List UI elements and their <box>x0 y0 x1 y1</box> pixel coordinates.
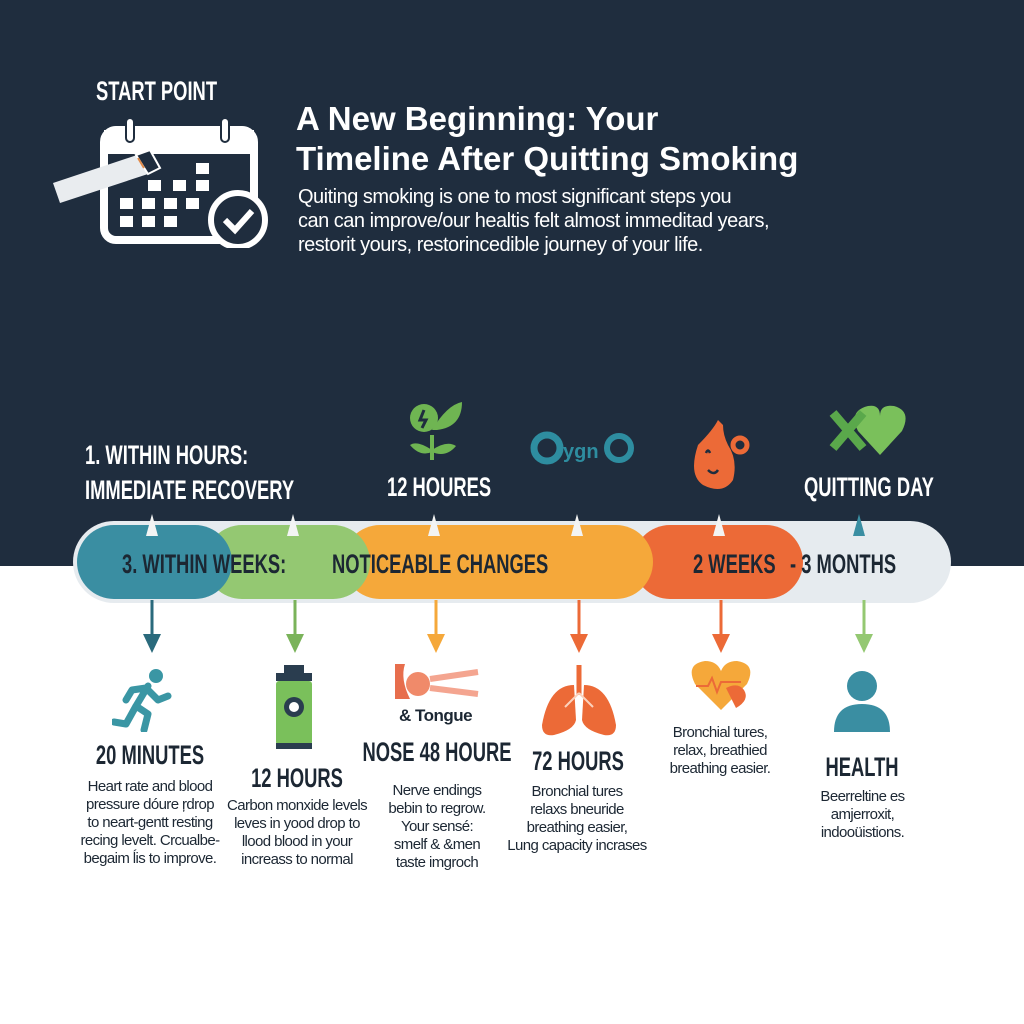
dark header background <box>0 0 1024 566</box>
column 2: 12 hours <box>227 763 368 868</box>
column 1: 20 minutes: to neart-gentt resting <box>87 814 213 831</box>
icon: heart bandage <box>830 406 906 455</box>
column 6: health: indooüistions. <box>821 824 904 841</box>
label: & tongue: & Tongue <box>399 706 472 725</box>
icon: oxygen logo <box>530 432 634 464</box>
column 3: nose 48 houre: NOSE 48 HOURE <box>363 737 511 767</box>
text: NOTICEABLE CHANGES <box>332 549 548 579</box>
text: 2 WEEKS <box>693 549 776 579</box>
title: A New Beginning: Your <box>296 100 658 137</box>
icon: nose <box>395 664 478 699</box>
icon: runner <box>112 669 172 732</box>
label: quitting day: QUITTING DAY <box>804 472 934 502</box>
column 1: 20 minutes: pressure dóure ŗdrop <box>86 796 214 813</box>
down arrows <box>143 600 873 653</box>
column 3: nose 48 houre: Nerve endings <box>393 782 481 799</box>
bar labels: 3. WITHIN WEEKS: <box>122 549 286 579</box>
icon: lungs <box>542 665 616 736</box>
start point label: START POINT <box>96 76 217 106</box>
stage heading: within hours: 1. WITHIN HOURS: <box>85 440 248 470</box>
column 4: 72 hours: Lung capacity incrases <box>507 837 647 854</box>
column 4: 72 hours: breathing easier, <box>527 819 627 836</box>
column 1: 20 minutes: 20 MINUTES <box>96 740 204 770</box>
column 2: 12 hours: Carbon monxide levels <box>227 797 367 814</box>
column 4: 72 hours <box>507 746 647 854</box>
column 4: 72 hours: relaxs bneuride <box>530 801 624 818</box>
column 1: 20 minutes: Heart rate and blood <box>88 778 212 795</box>
column 2: 12 hours: increass to normal <box>241 851 353 868</box>
column 2: 12 hours: 12 HOURS <box>251 763 343 793</box>
title <box>296 100 798 177</box>
column 5: bronchial text <box>670 724 770 777</box>
column 6: health: HEALTH <box>825 752 899 782</box>
column 2: 12 hours: leves in yood drop to <box>234 815 360 832</box>
column 3: nose 48 houre: bebin to regrow. <box>388 800 486 817</box>
column 1: 20 minutes: recing levelt. Crcualbe- <box>80 832 220 849</box>
icon: person <box>834 671 890 732</box>
title: Timeline After Quitting Smoking <box>296 140 798 177</box>
text: - 3 MONTHS <box>790 549 896 579</box>
column 1: 20 minutes <box>80 740 220 867</box>
intro text: restorit yours, restorincedible journey of your life. <box>298 234 703 256</box>
column 3: nose 48 houre: smelf & &men <box>394 836 480 853</box>
icon: orange face <box>694 420 750 489</box>
intro text <box>298 186 769 256</box>
column 4: 72 hours: Bronchial tures <box>531 783 623 800</box>
column 5: bronchial text: Bronchial tures, <box>673 724 767 741</box>
label: 12 houres: 12 HOURES <box>387 472 491 502</box>
icon: plant <box>410 402 462 460</box>
column 3: nose 48 houre: Your sensé: <box>401 818 473 835</box>
intro text: can can improve/our healtis felt almost immeditad years, <box>298 210 769 232</box>
column 6: health: Beerreltine es <box>820 788 905 805</box>
column 2: 12 hours: llood blood in your <box>242 833 352 850</box>
column 3: nose 48 houre: taste imgroch <box>396 854 478 871</box>
column 5: bronchial text: relax, breathied <box>673 742 767 759</box>
stage heading: within hours: IMMEDIATE RECOVERY <box>85 475 294 505</box>
icon: calendar with cigarette <box>53 119 268 248</box>
column 6: health <box>820 752 905 841</box>
intro text: Quiting smoking is one to most significant steps you <box>298 186 731 208</box>
column 3: nose 48 houre <box>363 737 511 871</box>
column 4: 72 hours: 72 HOURS <box>532 746 624 776</box>
column 6: health: amjerroxit, <box>831 806 894 823</box>
icon: heart pulse <box>692 661 750 710</box>
column 5: bronchial text: breathing easier. <box>670 760 770 777</box>
icon: canister <box>276 665 312 749</box>
stage heading: within hours <box>85 440 294 505</box>
timeline bar <box>73 514 951 603</box>
column 1: 20 minutes: begaim ĺis to improve. <box>84 850 216 867</box>
icon: oxygen logo: ygn <box>563 441 599 463</box>
